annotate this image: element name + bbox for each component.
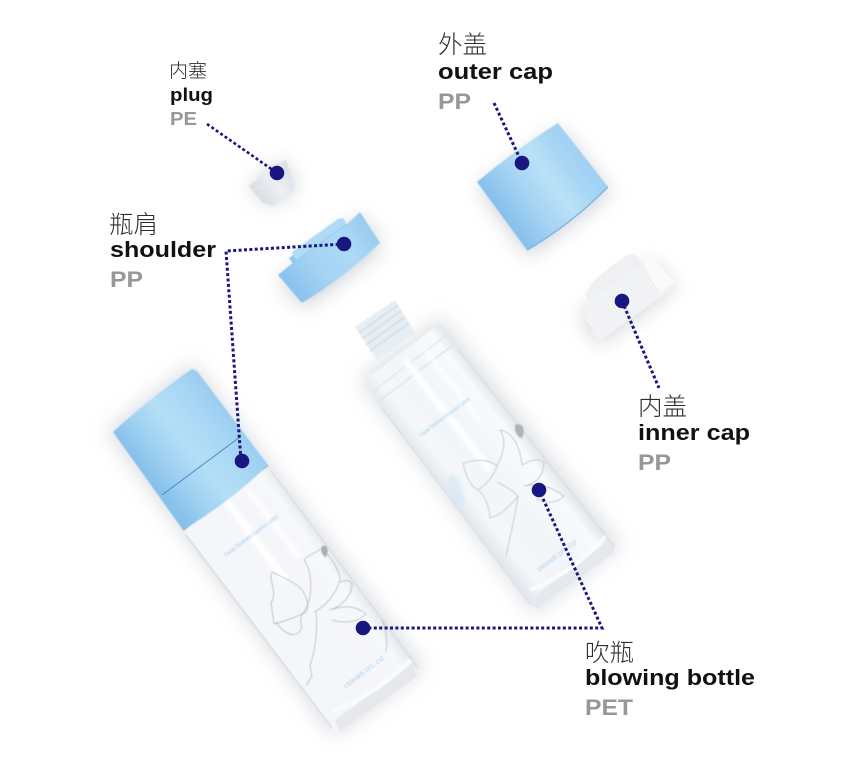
flower bud xyxy=(515,424,524,438)
leader: blowing bottle xyxy=(356,483,602,635)
flower illustration xyxy=(463,430,564,556)
threaded neck xyxy=(355,300,415,360)
flower bud xyxy=(321,546,328,557)
label: inner cap xyxy=(638,393,750,475)
leader: outer cap xyxy=(494,103,529,170)
plug part xyxy=(249,160,295,206)
label: outer cap xyxy=(438,31,553,114)
label: outer cap: outer cap xyxy=(438,59,553,84)
label: inner cap: inner cap xyxy=(638,420,750,445)
label: shoulder xyxy=(109,211,216,292)
bottle body xyxy=(365,323,615,609)
label: blowing bottle xyxy=(585,639,755,720)
label: inner cap: PP xyxy=(638,450,671,475)
outer cap part xyxy=(477,123,610,256)
label: shoulder: PP xyxy=(110,267,143,292)
big assembled bottle xyxy=(113,369,418,733)
shoulder part xyxy=(278,212,382,308)
label: plug: plug xyxy=(170,84,213,105)
pale blue smear xyxy=(445,473,467,511)
bottle label text: Facial Treatment Essence Lotion xyxy=(224,514,280,559)
label: plug: PE xyxy=(170,109,197,129)
bottle label text: Facial Treatment Essence Lotion xyxy=(419,396,472,439)
blue cap with seam xyxy=(113,369,268,530)
cap top xyxy=(586,254,642,304)
label: plug xyxy=(169,60,213,129)
label: shoulder: 瓶肩 xyxy=(109,211,158,239)
label: shoulder: shoulder xyxy=(110,237,216,262)
label: outer cap: PP xyxy=(438,89,471,114)
label: blowing bottle: 吹瓶 xyxy=(585,639,634,667)
bottle body xyxy=(183,465,418,733)
leader: shoulder xyxy=(226,237,351,468)
ribbed ring xyxy=(581,257,675,340)
leader: inner cap xyxy=(615,294,659,388)
leader: plug xyxy=(207,124,284,180)
big assembled bottle: 150ml/5.1FL.OZ xyxy=(343,655,386,691)
middle open bottle: 150ml/5.1FL.OZ xyxy=(537,540,579,574)
label: blowing bottle: blowing bottle xyxy=(585,665,755,690)
middle open bottle xyxy=(355,300,615,609)
label: outer cap: 外盖 xyxy=(438,31,487,59)
inner cap part xyxy=(581,254,675,345)
flower illustration xyxy=(271,548,387,686)
label: blowing bottle: PET xyxy=(585,695,634,720)
label: plug: 内塞 xyxy=(169,60,207,82)
label: inner cap: 内盖 xyxy=(638,393,687,421)
